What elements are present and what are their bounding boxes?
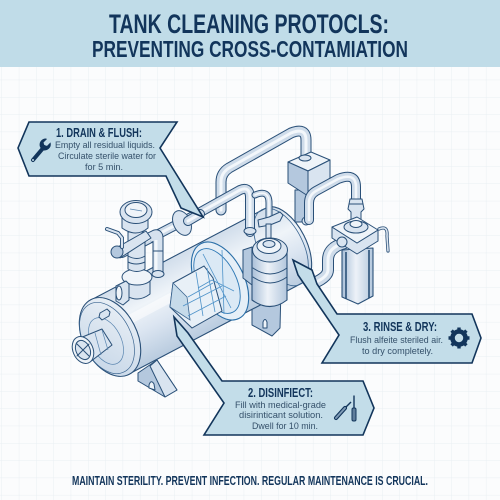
heading: 2. DISINFIECT: [248, 385, 313, 400]
header band [0, 0, 500, 67]
rear support leg [252, 288, 281, 336]
body text: Dwell for 10 min. [252, 421, 318, 432]
callout 2: disinfect [174, 317, 374, 435]
side clamp on tank [116, 281, 129, 305]
icon: screwdrivers [336, 396, 356, 421]
body text: for 5 min. [85, 162, 123, 173]
title [92, 9, 408, 62]
heading: 1. DRAIN & FLUSH: [56, 125, 142, 140]
front nozzle [68, 329, 112, 367]
far pipe behind tank [314, 243, 345, 283]
heading: 3. RINSE & DRY: [363, 319, 437, 334]
tank-mounted cartridge [243, 238, 288, 306]
front support leg [138, 360, 177, 397]
title: TANK CLEANING PROTOCLS: [109, 9, 389, 39]
body text: Circulate sterile water for [58, 151, 156, 162]
small valve on tank [258, 212, 283, 241]
elbow drop pipe [149, 235, 164, 278]
filter feed pipe [309, 177, 356, 220]
tank illustration [67, 131, 388, 397]
callout 1: drain and flush [18, 122, 203, 217]
body text [55, 140, 156, 173]
tank collar under gauge valve [122, 269, 152, 299]
front end cap [67, 287, 153, 387]
external filter unit [332, 199, 388, 304]
main upper pipe [221, 131, 306, 210]
icon: wrench [32, 138, 51, 161]
body text: Flush alfeite steriled air. [350, 335, 443, 346]
body text: Empty all residual liquids. [55, 140, 155, 151]
junction box [288, 152, 330, 225]
callout 3: rinse and dry [293, 260, 481, 363]
body text [235, 400, 326, 432]
cylindrical tank body [91, 200, 320, 374]
lower feed pipes [197, 189, 269, 234]
body text: disirinticant solution. [239, 410, 323, 421]
body text: to dry completely. [362, 346, 433, 357]
inlet pipe with flange [122, 208, 200, 253]
body text [350, 335, 443, 357]
icon: gear [448, 328, 470, 348]
cutaway window [170, 233, 260, 329]
body text: Fill with medical-grade [235, 400, 326, 411]
gauge valve assembly [107, 200, 152, 272]
